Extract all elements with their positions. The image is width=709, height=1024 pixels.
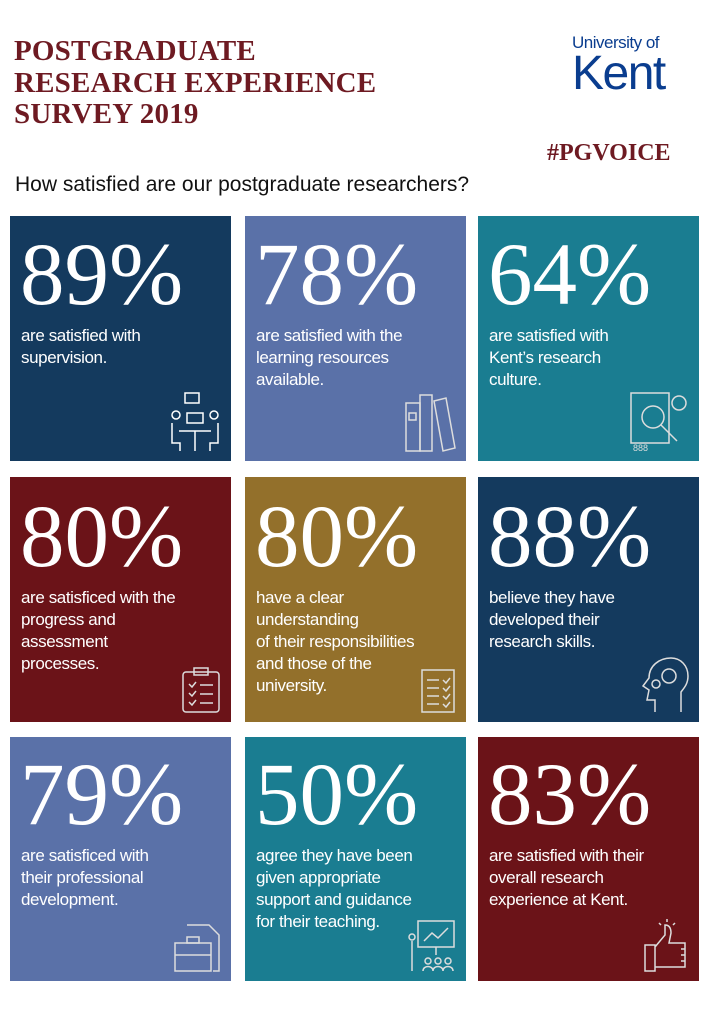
panel: responsibilities: 80% <box>255 488 418 586</box>
panel: teaching support <box>245 737 466 981</box>
panel: research skills: developed their <box>489 610 599 629</box>
panel: responsibilities: understanding <box>256 610 359 629</box>
panel: supervision: 89% <box>20 226 183 324</box>
title: POSTGRADUATE <box>14 35 256 67</box>
icon: meeting <box>171 392 219 451</box>
panel: research skills: believe they have <box>489 588 615 607</box>
icon: briefcase <box>174 924 220 972</box>
logo: University of Kent: University of <box>572 33 659 52</box>
panel: research skills: research skills. <box>489 632 595 651</box>
panel: professional development: 79% <box>20 746 183 844</box>
icon: checklist <box>421 669 455 713</box>
panel: learning resources: learning resources <box>256 348 389 367</box>
icon: magnifier: 888 <box>633 443 648 453</box>
icon: clipboard <box>182 667 220 713</box>
panel: responsibilities: of their responsibilities <box>256 632 414 651</box>
panel: overall experience <box>478 737 699 981</box>
panel: responsibilities: and those of the <box>256 654 372 673</box>
panel: research culture <box>478 216 699 461</box>
panel: responsibilities <box>245 477 466 722</box>
panel: learning resources: available. <box>256 370 324 389</box>
panel: overall experience: are satisfied with their <box>489 846 644 865</box>
panel: research culture: are satisfied with <box>489 326 608 345</box>
panel: progress and assessment: assessment <box>21 632 108 651</box>
panel: progress and assessment: progress and <box>21 610 115 629</box>
icon: head with gears <box>642 657 689 712</box>
logo: University of Kent: Kent <box>572 47 665 100</box>
icon: magnifier <box>630 392 687 453</box>
panel: supervision <box>10 216 231 461</box>
panel: supervision: are satisfied with <box>21 326 140 345</box>
panel: teaching support: agree they have been <box>256 846 412 865</box>
question heading: How satisfied are our postgraduate researchers? <box>15 173 469 196</box>
panel: teaching support: for their teaching. <box>256 912 380 931</box>
panel: research culture: culture. <box>489 370 542 389</box>
panel: overall experience: overall research <box>489 868 604 887</box>
panel: responsibilities: have a clear <box>256 588 344 607</box>
panel: professional development: their professional <box>21 868 143 887</box>
icon: thumbs up <box>644 919 686 972</box>
title: SURVEY 2019 <box>14 98 199 130</box>
panel: professional development: development. <box>21 890 118 909</box>
hashtag: #PGVOICE <box>547 140 671 166</box>
panel: research skills <box>478 477 699 722</box>
panel: learning resources: are satisfied with the <box>256 326 402 345</box>
panel: progress and assessment: 80% <box>20 488 183 586</box>
panel: professional development: are satisficed with <box>21 846 149 865</box>
panel: responsibilities: university. <box>256 676 327 695</box>
panel: teaching support: 50% <box>255 746 418 844</box>
panel: research culture: Kent’s research <box>489 348 601 367</box>
panel: progress and assessment: are satisficed with the <box>21 588 175 607</box>
panel: research skills: 88% <box>488 488 651 586</box>
panel: learning resources <box>245 216 466 461</box>
panel: learning resources: 78% <box>255 226 418 324</box>
panel: overall experience: 83% <box>488 746 651 844</box>
panel: teaching support: given appropriate <box>256 868 381 887</box>
icon: presentation <box>408 920 455 971</box>
panel: teaching support: support and guidance <box>256 890 412 909</box>
panel: professional development <box>10 737 231 981</box>
icon: books <box>405 394 456 452</box>
title <box>14 35 376 130</box>
panel: progress and assessment: processes. <box>21 654 99 673</box>
panel: research culture: 64% <box>488 226 651 324</box>
panel: progress and assessment <box>10 477 231 722</box>
title: RESEARCH EXPERIENCE <box>14 66 376 98</box>
panel: overall experience: experience at Kent. <box>489 890 628 909</box>
panel: supervision: supervision. <box>21 348 107 367</box>
